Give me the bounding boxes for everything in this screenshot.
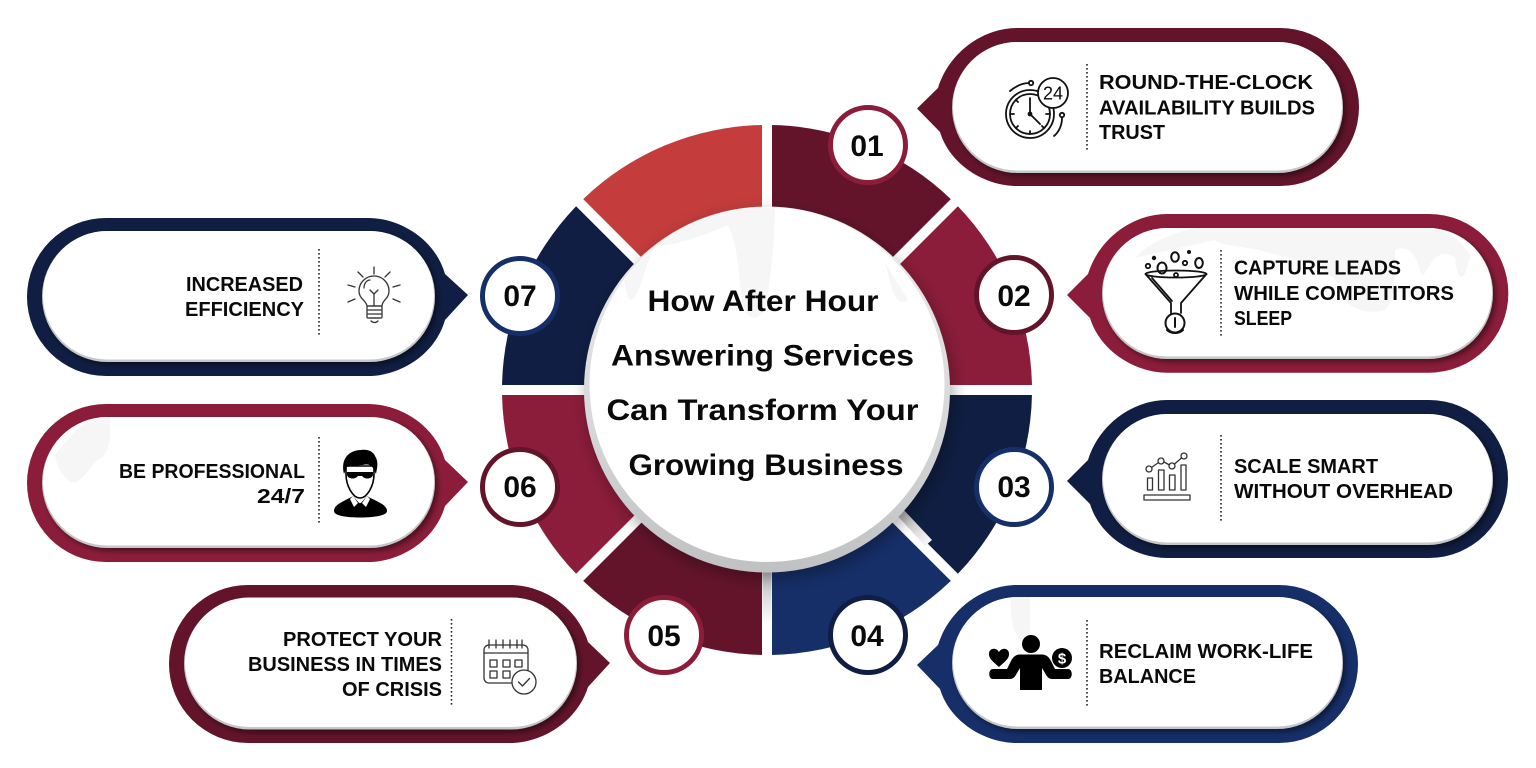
callout text 01 [1099, 71, 1315, 144]
callout 01 [917, 28, 1359, 186]
callout text 07: EFFICIENCY [185, 298, 304, 321]
callout text 03: SCALE SMART [1234, 455, 1378, 478]
callout text 05: PROTECT YOUR [283, 628, 442, 651]
callout text 01: ROUND-THE-CLOCK [1099, 71, 1313, 94]
central title circle [584, 205, 950, 572]
number badge 04: 04 [850, 620, 884, 653]
callout text 02: WHILE COMPETITORS [1234, 282, 1454, 305]
icon: work-life balance person: $ [1058, 650, 1067, 668]
callout 03 [1067, 400, 1508, 558]
segment 05 [583, 517, 762, 655]
icon: 24 hour clock [1006, 78, 1068, 138]
callout text 03: WITHOUT OVERHEAD [1234, 480, 1453, 503]
number badge 02 [976, 258, 1052, 332]
number badge 07 [482, 258, 558, 334]
icon: professional in sunglasses [334, 450, 387, 518]
icon: growth chart [1144, 453, 1190, 500]
number badge 02: 02 [997, 280, 1031, 313]
segment 07 [502, 206, 640, 385]
title text: Answering Services [611, 340, 914, 372]
callout text 06: 24/7 [257, 485, 305, 508]
callout text 06: BE PROFESSIONAL [119, 460, 305, 483]
callout text 04: BALANCE [1099, 665, 1196, 688]
ring of eight segments [502, 125, 1032, 655]
callout text 01: AVAILABILITY BUILDS [1099, 96, 1315, 120]
callout text 06 [119, 460, 305, 508]
callout text 02: SLEEP [1234, 307, 1292, 330]
segment 08 accent [583, 125, 762, 263]
number badge 05: 05 [647, 620, 681, 653]
number badge 06: 06 [503, 471, 537, 504]
number badge 01 [830, 108, 906, 182]
callout 07 [27, 218, 468, 376]
title text: Growing Business [628, 449, 904, 482]
icon: 24 hour clock: 24 [1043, 84, 1063, 104]
callout 02 [1067, 214, 1508, 373]
segment 02 [894, 206, 1032, 385]
callout text 05: BUSINESS IN TIMES [248, 653, 442, 676]
callout 05 [169, 585, 610, 743]
callout text 05 [248, 628, 442, 701]
callout text 02 [1234, 256, 1454, 330]
segment 06 [502, 395, 640, 574]
callout text 01: TRUST [1099, 121, 1165, 144]
number badge 05 [626, 598, 702, 672]
callout text 07 [185, 273, 304, 321]
number badge 01: 01 [850, 130, 884, 163]
segment 04 [772, 517, 951, 655]
callout text 05: OF CRISIS [342, 678, 442, 701]
icon: work-life balance person [989, 635, 1072, 690]
callout text 04 [1099, 640, 1313, 688]
number badge 06 [482, 450, 558, 524]
segment 03 [894, 395, 1032, 574]
icon: light bulb [348, 267, 400, 322]
number badge 04 [830, 598, 906, 672]
segment 01 [772, 125, 951, 263]
title text: Can Transform Your [606, 394, 919, 427]
title text [606, 285, 919, 482]
callout 06 [27, 404, 468, 562]
callout text 03 [1234, 455, 1453, 503]
callout 04 [917, 585, 1358, 743]
callout text 07: INCREASED [186, 273, 303, 296]
callout text 02: CAPTURE LEADS [1234, 256, 1401, 280]
title text: How After Hour [648, 285, 879, 318]
icon: funnel with coins [1146, 250, 1206, 333]
icon: calendar with check [484, 640, 536, 694]
number badge 03 [976, 450, 1052, 524]
number badge 07: 07 [503, 280, 537, 313]
callout text 04: RECLAIM WORK-LIFE [1099, 640, 1313, 663]
number badge 03: 03 [997, 471, 1031, 504]
